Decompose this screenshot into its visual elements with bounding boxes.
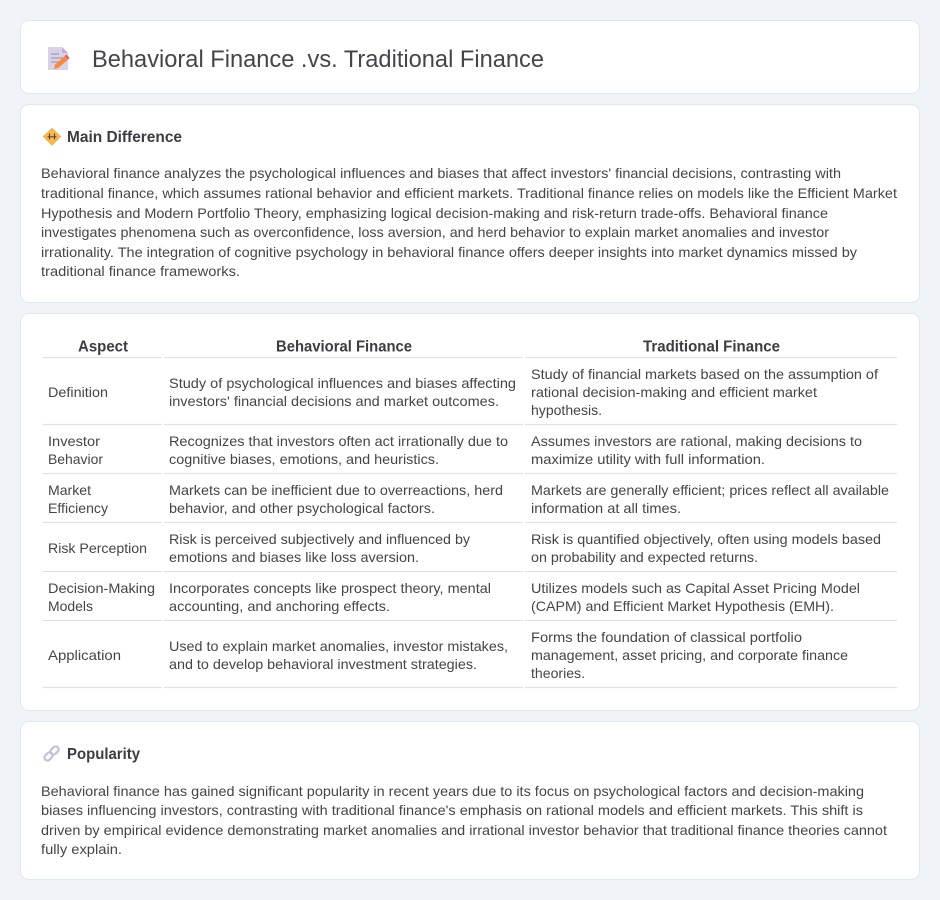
row: decision-making models [43,580,897,620]
row: definition: investors' financial decisions and market outcomes. [169,393,499,409]
table header: Traditional Finance [643,338,780,356]
row: definition: Study of psychological influences and biases affecting [169,375,516,391]
row: risk perception [43,531,897,572]
text block: main difference paragraph [41,165,897,279]
row: application: Forms the foundation of classical portfolio [531,629,802,645]
text block: popularity paragraph [41,783,887,857]
row: risk perception: Risk is perceived subjectively and influenced by [169,531,470,547]
row: decision-making models: (CAPM) and Efficient Market Hypothesis (EMH). [531,598,834,614]
icon: diamond sign [44,128,60,145]
text block: main difference paragraph: investigates phenomena such as overconfidence, loss aversion, and herd behavior to explain market anomalies and investor [41,224,829,240]
text block: popularity paragraph: Behavioral finance has gained significant popularity in recent years due to its focus on psychological factors and decision-making [41,783,864,799]
row: investor behavior [43,433,897,474]
icon: document with pencil [48,47,70,70]
table header: Behavioral Finance [276,338,412,356]
row: market efficiency: information at all times. [531,500,681,516]
row: application: theories. [531,665,585,681]
row: market efficiency: Markets are generally efficient; prices reflect all available [531,482,889,498]
row: investor behavior: Recognizes that investors often act irrationally due to [169,433,508,449]
icon: chain link [43,745,60,762]
table header: Aspect [78,338,129,356]
text block: main difference paragraph: Behavioral finance analyzes the psychological influences and biases that affect investors' financial decisions, contrasting with [41,165,841,181]
row: decision-making models: Decision-Making [48,580,155,596]
heading: popularity: Popularity [67,746,140,763]
text block: main difference paragraph: irrationality. The integration of cognitive psychology in behavioral finance offers deeper insights into market dynamics missed by [41,244,857,260]
text block: main difference paragraph: Hypothesis and Modern Portfolio Theory, emphasizing logical decision-making and risk-return trade-offs. Behavioral finance [41,205,828,221]
row: risk perception: emotions and biases like loss aversion. [169,549,419,565]
row: market efficiency: behavior, and other psychological factors. [169,500,435,516]
row: application: Used to explain market anomalies, investor mistakes, [169,638,508,654]
row: application [43,629,897,688]
row: definition: Definition [48,384,108,400]
row: decision-making models: Utilizes models such as Capital Asset Pricing Model [531,580,860,596]
row: application: and to develop behavioral investment strategies. [169,656,477,672]
row: investor behavior: cognitive biases, emotions, and heuristics. [169,451,439,467]
row: application: Application [48,647,121,663]
text block: main difference paragraph: traditional finance, which assumes rational behavior and efficient markets. Traditional finance relies on models like the Efficient Market [41,185,897,201]
row: investor behavior: maximize utility with full information. [531,451,765,467]
row: market efficiency: Market [48,482,91,498]
row: decision-making models: Incorporates concepts like prospect theory, mental [169,580,491,596]
heading: main difference: Main Difference [67,129,182,146]
row: application: management, asset pricing, and corporate finance [531,647,848,663]
row: risk perception: Risk is quantified objectively, often using models based [531,531,881,547]
row: definition [43,366,897,424]
table header [43,338,897,358]
row: market efficiency [43,482,897,522]
row: definition: Study of financial markets based on the assumption of [531,366,878,382]
text block: popularity paragraph: biases influencing investors, contrasting with traditional finance's emphasis on rational models and efficient markets. This shift is [41,802,863,818]
text block: popularity paragraph: fully explain. [41,841,122,857]
row: investor behavior: Behavior [48,451,103,467]
row: decision-making models: accounting, and anchoring effects. [169,598,390,614]
row: market efficiency: Markets can be inefficient due to overreactions, herd [169,482,503,498]
panel: title card [20,20,920,94]
panel: popularity [20,722,920,880]
row: investor behavior: Investor [48,433,100,449]
row: definition: hypothesis. [531,402,602,418]
title: Behavioral Finance .vs. Traditional Finance [92,46,544,73]
text block: main difference paragraph: traditional finance frameworks. [41,263,240,279]
panel: comparison table [20,314,920,710]
row: market efficiency: Efficiency [48,500,108,516]
row: investor behavior: Assumes investors are rational, making decisions to [531,433,862,449]
row: definition: rational decision-making and efficient market [531,384,817,400]
row: risk perception: Risk Perception [48,540,147,556]
panel: main difference [20,104,920,302]
row: risk perception: on probability and expected returns. [531,549,758,565]
text block: popularity paragraph: driven by empirical evidence demonstrating market anomalies and irrational investor behavior that traditional finance theories cannot [41,822,887,838]
row: decision-making models: Models [48,598,93,614]
